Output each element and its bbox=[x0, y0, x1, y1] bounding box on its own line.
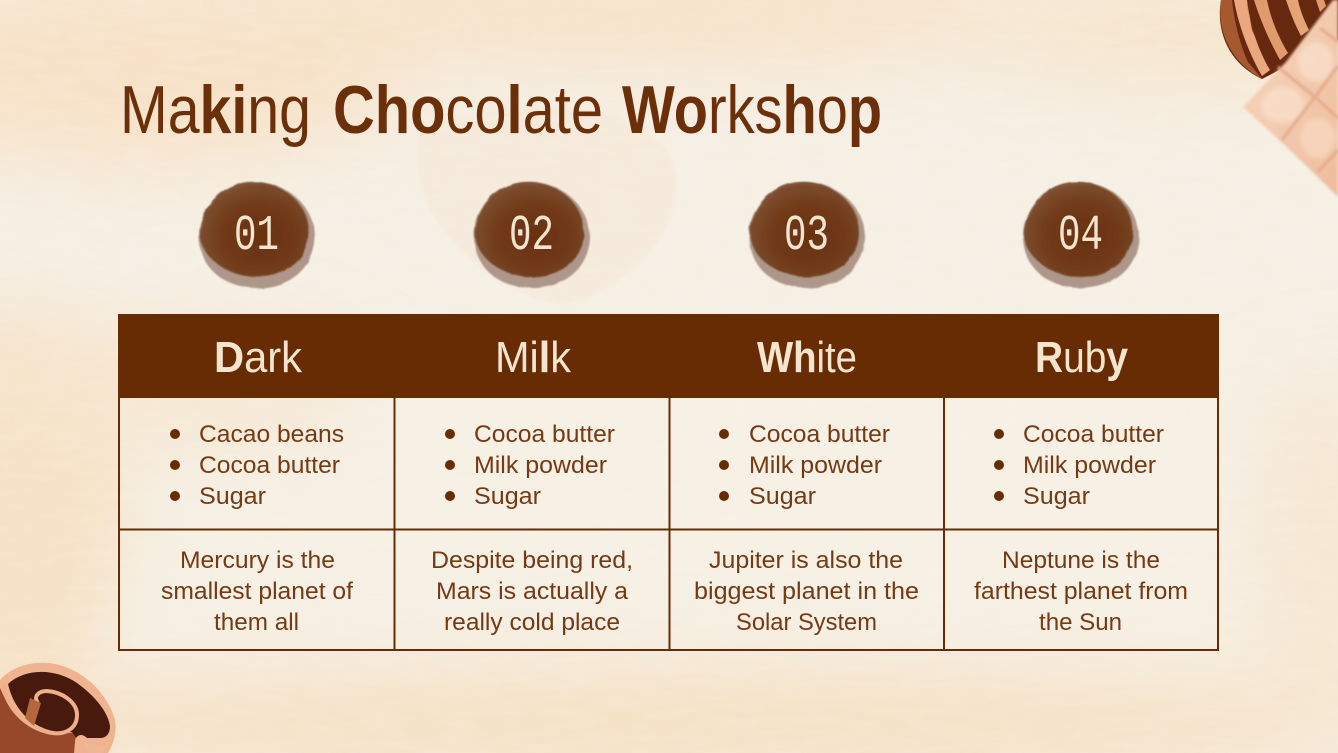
description: White: Jupiter is also the bbox=[709, 547, 903, 574]
column: Milk ingredients bbox=[445, 421, 615, 510]
column: White ingredients: Milk powder bbox=[749, 452, 882, 479]
description: Ruby: the Sun bbox=[1039, 609, 1122, 636]
decoration: chocolate curl, bottom left bbox=[0, 663, 116, 753]
description: Ruby: farthest planet from bbox=[974, 578, 1188, 605]
description: Milk: really cold place bbox=[444, 609, 620, 636]
badge 03: 03 bbox=[784, 208, 829, 265]
badge 02 bbox=[474, 182, 590, 288]
curl outer rim bbox=[0, 663, 116, 753]
number badges bbox=[199, 182, 1139, 288]
header row bbox=[118, 314, 1219, 398]
column: Dark ingredients: Sugar bbox=[199, 483, 266, 510]
title bbox=[120, 72, 882, 148]
title: Chocolate bbox=[333, 72, 603, 148]
badge 01 bbox=[199, 182, 315, 288]
description: Dark: them all bbox=[214, 609, 299, 636]
header: Ruby: Ruby bbox=[1035, 333, 1128, 382]
description: Milk: Despite being red, bbox=[431, 547, 633, 574]
curl inner strip bbox=[25, 698, 41, 726]
description: Dark bbox=[161, 547, 353, 636]
column: White ingredients bbox=[719, 421, 890, 510]
description: Ruby bbox=[974, 547, 1188, 636]
description: Milk bbox=[431, 547, 633, 636]
decoration: chocolate bar and roll, top right bbox=[1220, 0, 1338, 197]
description: White: biggest planet in the bbox=[694, 578, 919, 605]
description: White bbox=[694, 547, 919, 636]
icon: white chocolate tiles bbox=[1243, 0, 1338, 197]
column: Ruby ingredients bbox=[994, 421, 1164, 510]
header: Milk: Milk bbox=[495, 333, 572, 382]
badge 03 bbox=[749, 182, 865, 288]
column: Milk ingredients: Milk powder bbox=[474, 452, 607, 479]
comparison table bbox=[118, 314, 1219, 650]
badge 01: 01 bbox=[234, 208, 279, 265]
description: Dark: smallest planet of bbox=[161, 578, 353, 605]
column: Ruby ingredients: Cocoa butter bbox=[1023, 421, 1164, 448]
column: Dark ingredients: Cocoa butter bbox=[199, 452, 340, 479]
column: Milk ingredients: Cocoa butter bbox=[474, 421, 615, 448]
description: Ruby: Neptune is the bbox=[1002, 547, 1160, 574]
description: White: Solar System bbox=[736, 609, 877, 636]
table body tint bbox=[119, 398, 1218, 650]
header: White: White bbox=[757, 333, 857, 382]
curl body bbox=[0, 688, 76, 753]
icon: dark chocolate roll bbox=[1220, 0, 1338, 79]
column: Dark ingredients: Cacao beans bbox=[199, 421, 344, 448]
curl spiral highlight bbox=[3, 684, 77, 733]
column: Ruby ingredients: Sugar bbox=[1023, 483, 1090, 510]
table grid lines bbox=[119, 398, 1218, 650]
description: Dark: Mercury is the bbox=[180, 547, 335, 574]
description: Milk: Mars is actually a bbox=[436, 578, 629, 605]
badge 04 bbox=[1023, 182, 1139, 288]
curl dark interior bbox=[8, 672, 110, 738]
title: Making bbox=[120, 72, 311, 148]
title: Workshop bbox=[622, 72, 882, 148]
badge 02: 02 bbox=[509, 208, 554, 265]
column: Dark ingredients bbox=[170, 421, 344, 510]
column: Ruby ingredients: Milk powder bbox=[1023, 452, 1156, 479]
curl tail bbox=[83, 740, 108, 753]
column: White ingredients: Cocoa butter bbox=[749, 421, 890, 448]
header: Dark: Dark bbox=[214, 333, 303, 382]
column: White ingredients: Sugar bbox=[749, 483, 816, 510]
column: Milk ingredients: Sugar bbox=[474, 483, 541, 510]
badge 04: 04 bbox=[1058, 208, 1103, 265]
